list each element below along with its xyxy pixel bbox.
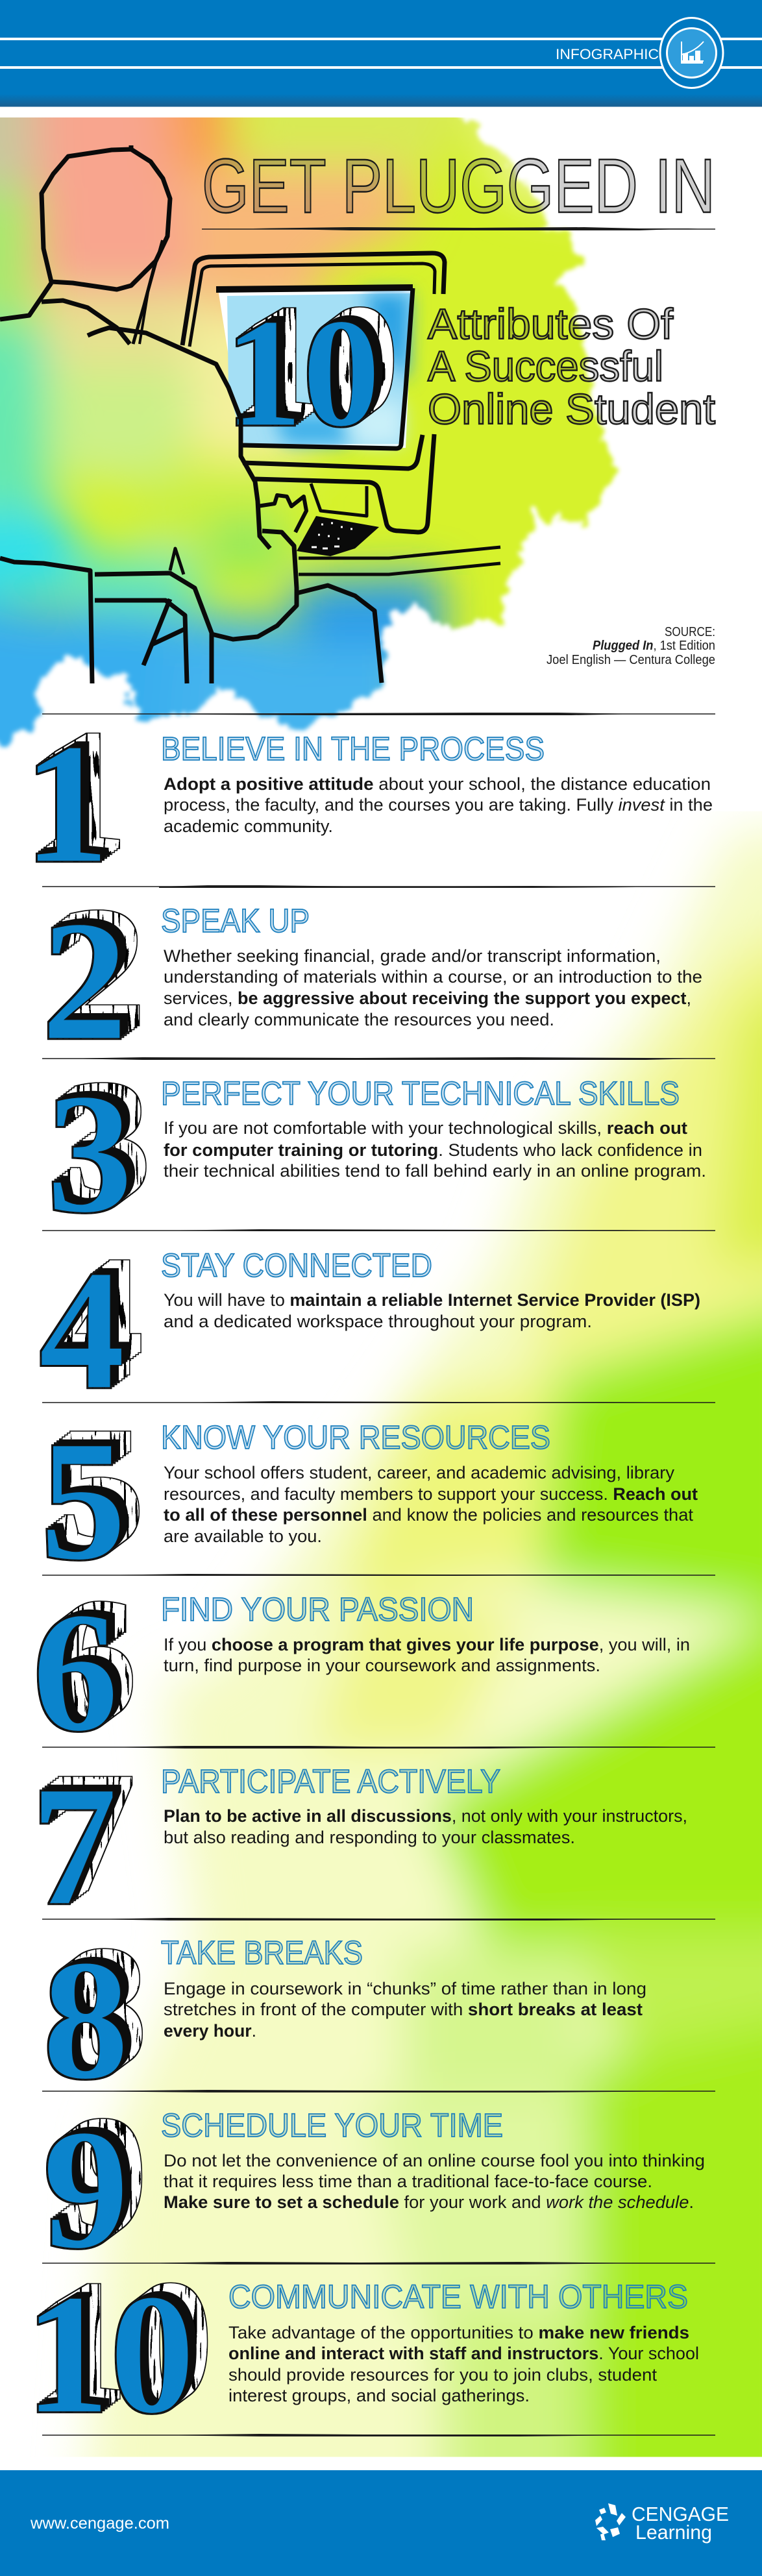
icon: infographic badge <box>660 18 723 88</box>
number 9: 9 <box>43 2094 129 2285</box>
body text: resources, and faculty members to support your success. Reach out <box>164 1484 698 1504</box>
chair <box>0 548 212 683</box>
body text <box>164 1463 698 1546</box>
item 1 <box>23 709 713 899</box>
watercolor background: hero <box>0 117 622 750</box>
body text: academic community. <box>164 816 333 836</box>
logo: Cengage Learning: CENGAGE <box>632 2503 729 2525</box>
body text: every hour. <box>164 2021 256 2041</box>
heading: SCHEDULE YOUR TIME <box>161 2107 503 2144</box>
heading: BELIEVE IN THE PROCESS <box>161 730 545 767</box>
heading: TAKE BREAKS <box>161 1934 363 1971</box>
heading: PERFECT YOUR TECHNICAL SKILLS <box>161 1075 680 1112</box>
body text: should provide resources for you to join clubs, student <box>228 2365 657 2385</box>
number 8: 8 <box>43 1925 129 2115</box>
number 2: 2 <box>42 886 127 1076</box>
body text <box>164 774 713 836</box>
body text: understanding of materials within a course, or an introduction to the <box>164 967 702 987</box>
body text <box>164 1118 706 1181</box>
body text <box>164 946 702 1029</box>
heading: FIND YOUR PASSION <box>161 1591 474 1628</box>
keyboard <box>297 516 379 556</box>
body text: and a dedicated workspace throughout your program. <box>164 1312 592 1331</box>
item 5 <box>40 1406 698 1596</box>
person <box>0 145 382 683</box>
logo: Cengage Learning: Learning <box>635 2521 712 2544</box>
header label: INFOGRAPHIC <box>556 46 659 62</box>
body text: process, the faculty, and the courses you are taking. Fully invest in the <box>164 795 713 815</box>
item 9 <box>43 2094 705 2285</box>
subtitle: Attributes Of <box>428 300 674 348</box>
heading: KNOW YOUR RESOURCES <box>161 1419 550 1456</box>
item 7 <box>31 1751 687 1941</box>
body text: their technical abilities tend to fall behind early in an online program. <box>164 1161 706 1181</box>
number 4: 4 <box>39 1235 125 1425</box>
body text: Do not let the convenience of an online course fool you into thinking <box>164 2151 705 2170</box>
computer monitor <box>182 253 445 532</box>
heading: PARTICIPATE ACTIVELY <box>161 1763 500 1800</box>
source credit: Joel English — Centura College <box>547 653 715 667</box>
body text <box>164 1290 700 1331</box>
body text: Adopt a positive attitude about your school, the distance education <box>164 774 711 794</box>
number 6: 6 <box>32 1577 118 1767</box>
header banner <box>0 0 762 106</box>
body text: Engage in coursework in “chunks” of time rather than in long <box>164 1979 646 1998</box>
body text: If you are not comfortable with your technological skills, reach out <box>164 1118 687 1138</box>
body text <box>228 2323 699 2405</box>
body text <box>164 1806 687 1847</box>
subtitle: A Successful <box>428 342 663 390</box>
item 4 <box>39 1235 700 1425</box>
heading: STAY CONNECTED <box>161 1247 432 1284</box>
body text: Your school offers student, career, and academic advising, library <box>164 1463 674 1482</box>
number 1: 1 <box>23 709 109 899</box>
body text: services, be aggressive about receiving the support you expect, <box>164 988 691 1008</box>
body text: are available to you. <box>164 1527 322 1546</box>
number 7: 7 <box>31 1751 117 1941</box>
source credit <box>547 625 715 667</box>
item 3 <box>47 1059 706 1249</box>
body text: Take advantage of the opportunities to make new friends <box>228 2323 689 2342</box>
body text: Whether seeking financial, grade and/or transcript information, <box>164 946 661 966</box>
subtitle: Online Student <box>428 385 715 433</box>
number 3: 3 <box>47 1059 132 1249</box>
item 10 <box>25 2259 699 2449</box>
body text: turn, find purpose in your coursework and assignments. <box>164 1656 600 1675</box>
icon: logo shards <box>595 2503 626 2540</box>
number 10: 10 <box>25 2259 195 2449</box>
body text: stretches in front of the computer with short breaks at least <box>164 2000 643 2019</box>
body text: for computer training or tutoring. Students who lack confidence in <box>164 1140 702 1160</box>
number 5: 5 <box>40 1406 126 1596</box>
subtitle <box>428 300 715 433</box>
desk <box>299 547 500 574</box>
source credit: SOURCE: <box>665 625 715 639</box>
heading: SPEAK UP <box>161 902 310 939</box>
body text: and clearly communicate the resources you need. <box>164 1010 554 1029</box>
number 10 on screen: 10 <box>225 286 380 459</box>
illustration: student at computer <box>0 145 500 683</box>
item 2 <box>42 886 702 1076</box>
body text: to all of these personnel and know the policies and resources that <box>164 1505 693 1525</box>
body text: Plan to be active in all discussions, not only with your instructors, <box>164 1806 687 1826</box>
item 6 <box>32 1577 690 1767</box>
watercolor background: lower section <box>84 831 762 2531</box>
computer screen <box>218 288 413 448</box>
body text: but also reading and responding to your classmates. <box>164 1828 575 1847</box>
body text <box>164 1979 646 2041</box>
item 8 <box>43 1925 646 2115</box>
source credit: Plugged In, 1st Edition <box>593 639 715 653</box>
body text <box>164 2151 705 2212</box>
body text: You will have to maintain a reliable Internet Service Provider (ISP) <box>164 1290 700 1310</box>
logo: Cengage Learning <box>595 2503 729 2544</box>
footer <box>0 2470 762 2576</box>
body text: Make sure to set a schedule for your work and work the schedule. <box>164 2192 694 2212</box>
website url: www.cengage.com <box>30 2514 169 2533</box>
body text: online and interact with staff and instructors. Your school <box>228 2344 699 2363</box>
body text: that it requires less time than a traditional face-to-face course. <box>164 2172 652 2191</box>
body text: If you choose a program that gives your life purpose, you will, in <box>164 1635 690 1654</box>
heading: COMMUNICATE WITH OTHERS <box>228 2278 688 2315</box>
body text <box>164 1635 690 1675</box>
body text: interest groups, and social gatherings. <box>228 2386 530 2405</box>
